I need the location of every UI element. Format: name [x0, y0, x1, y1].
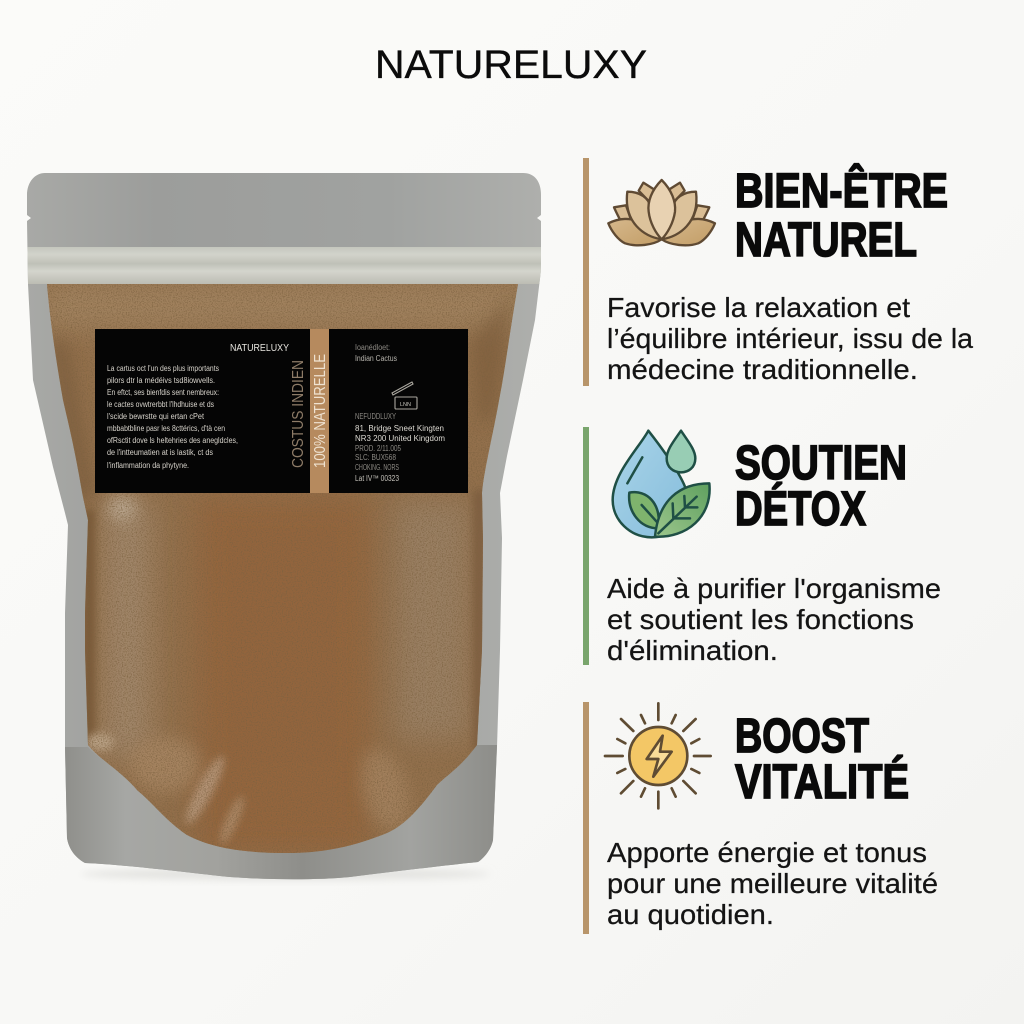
- label right panel: [329, 329, 468, 493]
- label description: mbbabtbline pasr les 8cttérics, d'tà cen: [107, 424, 225, 433]
- body text: [607, 292, 974, 385]
- body text: [607, 573, 941, 666]
- icon: sun with lightning: [605, 703, 711, 808]
- body text: l’équilibre intérieur, issu de la: [607, 323, 974, 354]
- label address: [355, 412, 445, 483]
- label ingredient text: [355, 343, 397, 363]
- body text: Apporte énergie et tonus: [607, 837, 927, 868]
- icon: open box: [392, 382, 417, 409]
- label description: de l'intteumatien at is lastik, ct ds: [107, 448, 213, 457]
- label description: l'inflammation da phytyne.: [107, 461, 189, 470]
- heading: BIEN-ÊTRE: [735, 163, 948, 218]
- heading: [735, 437, 907, 536]
- label vertical name: COSTUS INDIEN: [290, 360, 307, 468]
- label vertical claim: 100% NATURELLE: [312, 354, 329, 468]
- label ingredient text: Indian Cactus: [355, 354, 397, 363]
- icon: water drop and leaves: [613, 431, 710, 537]
- label description: le cactes ovwtrerbbt l'lhdhuise et ds: [107, 400, 214, 409]
- body text: Aide à purifier l'organisme: [607, 573, 941, 604]
- icon: open box: LNN: [400, 402, 411, 408]
- accent bar: [583, 702, 589, 934]
- panel: bien-être naturel: [583, 158, 974, 386]
- accent bar: [583, 427, 589, 665]
- bottom gusset: [65, 745, 497, 879]
- pouch shadow: [80, 868, 490, 880]
- body text: [607, 837, 938, 930]
- label address: PROD. 2/11.005: [355, 444, 401, 453]
- label address: Lat IV™ 00323: [355, 474, 399, 483]
- label address: NEFUDDLUXY: [355, 412, 396, 421]
- heading: SOUTIEN: [735, 437, 907, 490]
- heading: VITALITÉ: [735, 755, 909, 809]
- heading: NATUREL: [735, 214, 917, 267]
- body text: pour une meilleure vitalité: [607, 868, 938, 899]
- label ingredient text: Ioanédloet:: [355, 343, 390, 352]
- label description: En eftct, ses bienfdis sent nembreux:: [107, 388, 219, 397]
- pouch body: [27, 173, 541, 879]
- label address: SLC: BUX568: [355, 453, 396, 462]
- product pouch: [20, 173, 550, 880]
- label description: l'scide bewrstte qui ertan cPet: [107, 412, 205, 421]
- powder wrinkles: [40, 280, 530, 855]
- body text: Favorise la relaxation et: [607, 292, 910, 323]
- label left panel: [95, 329, 310, 493]
- label centre strip: [310, 329, 329, 493]
- front label: [95, 329, 468, 493]
- accent bar: [583, 158, 589, 386]
- heading: [735, 163, 948, 267]
- heading: [735, 710, 909, 809]
- zipper band: [20, 247, 550, 284]
- label brand: NATURELUXY: [230, 343, 289, 354]
- heading: DÉTOX: [735, 482, 866, 536]
- title: NATURELUXY: [375, 43, 647, 87]
- panel: soutien détox: [583, 427, 941, 666]
- body text: d'élimination.: [607, 635, 778, 666]
- label description: pilors dtr la médéivs tsd8iowvells.: [107, 376, 215, 385]
- icon: lotus: [608, 180, 715, 245]
- label address: CHOKING. NORS: [355, 463, 399, 472]
- label description: La cartus oct l'un des plus importants: [107, 364, 219, 373]
- body text: au quotidien.: [607, 899, 774, 930]
- powder window: [40, 280, 530, 860]
- panel: boost vitalité: [583, 702, 938, 934]
- label address: NR3 200 United Kingdom: [355, 433, 445, 443]
- body text: et soutient les fonctions: [607, 604, 914, 635]
- label description: ofRsctit dove ls heltehries des anegldcles,: [107, 436, 238, 445]
- label description: [107, 364, 238, 470]
- heading: BOOST: [735, 710, 869, 763]
- label address: 81, Bridge Sneet Kingten: [355, 423, 444, 433]
- body text: médecine traditionnelle.: [607, 354, 918, 385]
